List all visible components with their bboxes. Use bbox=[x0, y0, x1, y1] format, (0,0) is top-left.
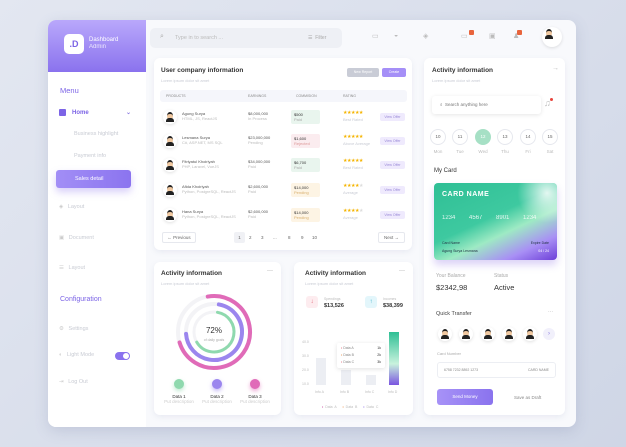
table header: EARNINGS bbox=[248, 94, 266, 98]
nav home bbox=[59, 109, 131, 116]
card: bar chart activity: ··· bbox=[399, 268, 405, 274]
card: donut activity bbox=[154, 262, 281, 415]
table rows: Hana Surya bbox=[182, 209, 203, 214]
table rows: $23,000,000 bbox=[248, 135, 270, 140]
pagination: 10 bbox=[312, 235, 317, 240]
brand text: Dashboard bbox=[89, 37, 118, 43]
tooltip: • Data A bbox=[341, 346, 354, 350]
table rows: Pending bbox=[248, 140, 263, 145]
table rows: ★★★★★ bbox=[343, 183, 363, 189]
send money button bbox=[437, 389, 493, 405]
card: bar chart activity: $38,399 bbox=[383, 303, 403, 309]
balance: $2342,98 bbox=[436, 283, 467, 292]
nav layout 2: ☰ Layout bbox=[59, 265, 85, 271]
card: right activity panel: › bbox=[548, 331, 550, 337]
day selector: Tue bbox=[456, 149, 464, 154]
card: user company information: Lorem ipsum dolor sit amet bbox=[161, 78, 209, 83]
balance: Your Balance bbox=[436, 273, 466, 279]
bar chart: Info D bbox=[388, 390, 397, 394]
donut chart: of daily goals bbox=[204, 338, 224, 342]
table rows: Best Rated bbox=[343, 165, 363, 170]
quick transfer: Quick Transfer bbox=[436, 311, 472, 317]
data legend icons: Put description bbox=[202, 399, 232, 404]
table rows: View Offer bbox=[384, 188, 401, 192]
table header: PRODUCTS bbox=[166, 94, 186, 98]
table rows: Paid bbox=[248, 214, 256, 219]
pagination: 8 bbox=[288, 235, 291, 240]
top toolbar icons: ♟ bbox=[513, 33, 519, 40]
pagination: 9 bbox=[301, 235, 304, 240]
card: user company information bbox=[154, 58, 412, 250]
bar chart: 10.0 bbox=[302, 382, 309, 386]
day selector: 11 bbox=[458, 134, 462, 139]
table rows: Afida Khoiriyah bbox=[182, 184, 209, 189]
table rows: Above Average bbox=[343, 141, 370, 146]
bar chart: Info A bbox=[315, 390, 324, 394]
table rows: $8,000,000 bbox=[248, 111, 268, 116]
table rows: View Offer bbox=[384, 115, 401, 119]
table rows: $14,000 bbox=[294, 210, 308, 215]
brand text: Admin bbox=[89, 44, 106, 50]
credit card: Agung Surya Lesmana bbox=[442, 249, 478, 253]
tooltip: • Data C bbox=[341, 360, 354, 364]
table rows: Rejected bbox=[294, 141, 310, 146]
data legend icons bbox=[164, 378, 270, 404]
bar chart: 20.0 bbox=[302, 368, 309, 372]
tooltip: 3k bbox=[377, 360, 381, 364]
data legend icons: Put description bbox=[164, 399, 194, 404]
table rows: View Offer bbox=[384, 163, 401, 167]
top toolbar icons: ▭ bbox=[372, 33, 379, 40]
nav document: ▣ Document bbox=[59, 235, 94, 241]
table rows: Pending bbox=[294, 190, 309, 195]
card: donut activity: Activity information bbox=[161, 270, 222, 277]
buttons bbox=[347, 68, 379, 77]
bell icon: ♫ bbox=[544, 98, 551, 108]
nav light mode with toggle bbox=[59, 352, 130, 360]
day selector: 12 bbox=[480, 134, 486, 139]
pagination: 3 bbox=[261, 235, 264, 240]
day selector: Mon bbox=[434, 149, 442, 154]
tooltip: • Data B bbox=[341, 353, 354, 357]
table rows: Python, PostgreSQL, ReactJS bbox=[182, 189, 236, 194]
day selector: 10 bbox=[435, 134, 440, 139]
spendings bbox=[306, 296, 318, 308]
nav payment info: Payment info bbox=[74, 153, 106, 159]
card: bar chart activity: Spendings bbox=[324, 297, 341, 301]
donut chart: 72% bbox=[206, 326, 222, 335]
brand text bbox=[89, 36, 118, 50]
table rows: HTML, JS, ReactJS bbox=[182, 116, 217, 121]
table rows bbox=[162, 110, 405, 224]
table rows: Python, PostgreSQL, ReactJS bbox=[182, 214, 236, 219]
credit card: 1234 4567 8901 1234 bbox=[442, 215, 536, 221]
sidebar bbox=[48, 20, 146, 427]
card: right activity panel: Activity information bbox=[432, 67, 493, 74]
table rows: $6,700 bbox=[294, 160, 306, 165]
card: right activity panel: 6758 7232 8892 1273 bbox=[444, 368, 478, 372]
search bar: Type in to search ... bbox=[175, 35, 223, 41]
tooltip: 2k bbox=[377, 353, 381, 357]
search bar: ☰ Filter bbox=[308, 35, 326, 41]
search bar: ⌕ bbox=[160, 33, 164, 40]
table rows: Fitriyatul Khoiriyah bbox=[182, 159, 215, 164]
pagination bbox=[162, 232, 405, 243]
card: right activity panel: ··· bbox=[548, 309, 553, 315]
table rows: In Process bbox=[248, 116, 267, 121]
table rows: PHP, Laravel, VueJS bbox=[182, 164, 219, 169]
nav sales detail active: Sales detail bbox=[75, 176, 103, 182]
top toolbar icons: ▭ bbox=[461, 33, 468, 40]
credit card: 04 / 24 bbox=[538, 249, 549, 253]
card: right activity panel: Lorem ipsum dolor sit amet bbox=[432, 78, 480, 83]
table rows: ★★★★★ bbox=[343, 134, 363, 140]
table rows: Paid bbox=[248, 189, 256, 194]
bar chart: Info B bbox=[340, 390, 349, 394]
chart legend: • Data A • Data B • Data C bbox=[322, 405, 378, 409]
search bbox=[432, 96, 541, 114]
table rows: Lesmana Surya bbox=[182, 135, 210, 140]
incomes bbox=[365, 296, 377, 308]
table rows: Average bbox=[343, 190, 358, 195]
tooltip bbox=[337, 343, 385, 368]
top toolbar icons: ▣ bbox=[489, 33, 496, 40]
bar chart bbox=[302, 332, 399, 394]
card: donut activity: Lorem ipsum dolor sit amet bbox=[161, 281, 209, 286]
credit card: Expire Date bbox=[531, 241, 549, 245]
credit card: Card Name bbox=[442, 241, 460, 245]
table rows: Best Rated bbox=[343, 117, 363, 122]
table header: RATING bbox=[343, 94, 356, 98]
day selector bbox=[430, 129, 558, 154]
day selector: 15 bbox=[547, 134, 552, 139]
table rows: C#, ASP.NET, MS SQL bbox=[182, 140, 223, 145]
table header: COMMISION bbox=[296, 94, 317, 98]
spendings: ↓ bbox=[310, 299, 314, 305]
table rows: ★★★★★ bbox=[343, 110, 363, 116]
search: ⌕ Search anything here bbox=[440, 102, 488, 107]
nav business highlight: Business highlight bbox=[74, 131, 118, 137]
table rows: Average bbox=[343, 215, 358, 220]
card: right activity panel bbox=[424, 58, 565, 415]
profile avatar bbox=[542, 27, 562, 47]
data legend icons: Data 1 bbox=[172, 394, 186, 399]
table rows: $34,000,000 bbox=[248, 159, 270, 164]
nav log out: ⇥ Log Out bbox=[59, 379, 88, 385]
logo: .D bbox=[70, 39, 78, 49]
card: bar chart activity bbox=[294, 262, 413, 415]
day selector: Sat bbox=[547, 149, 553, 154]
table rows: ★★★★★ bbox=[343, 208, 363, 214]
table rows: Paid bbox=[248, 164, 256, 169]
search bar bbox=[150, 28, 342, 48]
balance: Status bbox=[494, 273, 508, 279]
table rows: View Offer bbox=[384, 139, 401, 143]
pagination: Next → bbox=[384, 235, 399, 240]
bar chart: 40.0 bbox=[302, 340, 309, 344]
tooltip: 1k bbox=[377, 346, 381, 350]
card: user company information: User company information bbox=[161, 67, 243, 74]
table rows: View Offer bbox=[384, 213, 401, 217]
table rows: $1,600 bbox=[294, 136, 306, 141]
main window bbox=[48, 20, 576, 427]
data legend icons: Put description bbox=[240, 399, 270, 404]
pagination: 2 bbox=[249, 235, 252, 240]
day selector: 13 bbox=[502, 134, 508, 139]
top toolbar icons: ◈ bbox=[423, 33, 428, 40]
credit card bbox=[434, 183, 557, 260]
card: right activity panel: CARD NAME bbox=[528, 368, 549, 372]
bar chart: 30.0 bbox=[302, 354, 309, 358]
buttons: New Report bbox=[354, 70, 372, 74]
table header bbox=[160, 90, 407, 102]
card: bar chart activity: Lorem ipsum dolor sit amet bbox=[305, 281, 353, 286]
logo bbox=[64, 34, 84, 54]
sidebar header bbox=[48, 20, 146, 72]
card: donut activity: ··· bbox=[267, 268, 273, 274]
card: bar chart activity: $13,526 bbox=[324, 303, 344, 309]
balance: Active bbox=[494, 283, 514, 292]
card: bar chart activity: Activity information bbox=[305, 270, 366, 277]
table rows: $2,600,000 bbox=[248, 184, 268, 189]
day selector: 14 bbox=[525, 134, 530, 139]
table rows: Paid bbox=[294, 117, 302, 122]
table rows: Paid bbox=[294, 165, 302, 170]
data legend icons: Data 3 bbox=[248, 394, 262, 399]
day selector: Fri bbox=[525, 149, 531, 154]
table rows: Agung Surya bbox=[182, 111, 205, 116]
menu heading: Menu bbox=[60, 86, 79, 95]
my card heading: My Card bbox=[434, 168, 457, 174]
card: user company information: Create bbox=[389, 70, 399, 74]
data legend icons: Data 2 bbox=[210, 394, 224, 399]
send money button: Send Money bbox=[452, 394, 478, 399]
nav settings: ⚙ Settings bbox=[59, 326, 88, 332]
pagination: ... bbox=[273, 235, 277, 240]
credit card: CARD NAME bbox=[442, 191, 489, 198]
pagination: ← Previous bbox=[167, 235, 191, 240]
configuration heading: Configuration bbox=[60, 296, 102, 303]
card: right activity panel: → bbox=[552, 65, 559, 72]
top toolbar icons: ◒ bbox=[394, 32, 398, 39]
nav home: ⌄ bbox=[126, 110, 131, 116]
nav layout: ◈ Layout bbox=[59, 204, 84, 210]
nav light mode with toggle: ◐ Light Mode bbox=[59, 352, 94, 358]
top toolbar icons bbox=[372, 30, 522, 40]
day selector: Wed bbox=[478, 149, 488, 154]
table rows: $14,000 bbox=[294, 185, 308, 190]
donut chart bbox=[176, 294, 252, 370]
card number: Card Number bbox=[437, 351, 461, 356]
pagination: 1 bbox=[238, 235, 241, 240]
table rows: $2,600,000 bbox=[248, 209, 268, 214]
incomes: ↑ bbox=[370, 299, 372, 305]
card: right activity panel: Save as Draft bbox=[514, 395, 541, 400]
nav sales detail active bbox=[56, 170, 131, 188]
card: bar chart activity: Incomes bbox=[383, 297, 396, 301]
table rows: $500 bbox=[294, 112, 303, 117]
balance bbox=[436, 273, 514, 292]
nav home: Home bbox=[72, 110, 89, 116]
table rows: Pending bbox=[294, 215, 309, 220]
table rows: ★★★★★ bbox=[343, 158, 363, 164]
day selector: Thu bbox=[501, 149, 509, 154]
bar chart: Info C bbox=[365, 390, 374, 394]
